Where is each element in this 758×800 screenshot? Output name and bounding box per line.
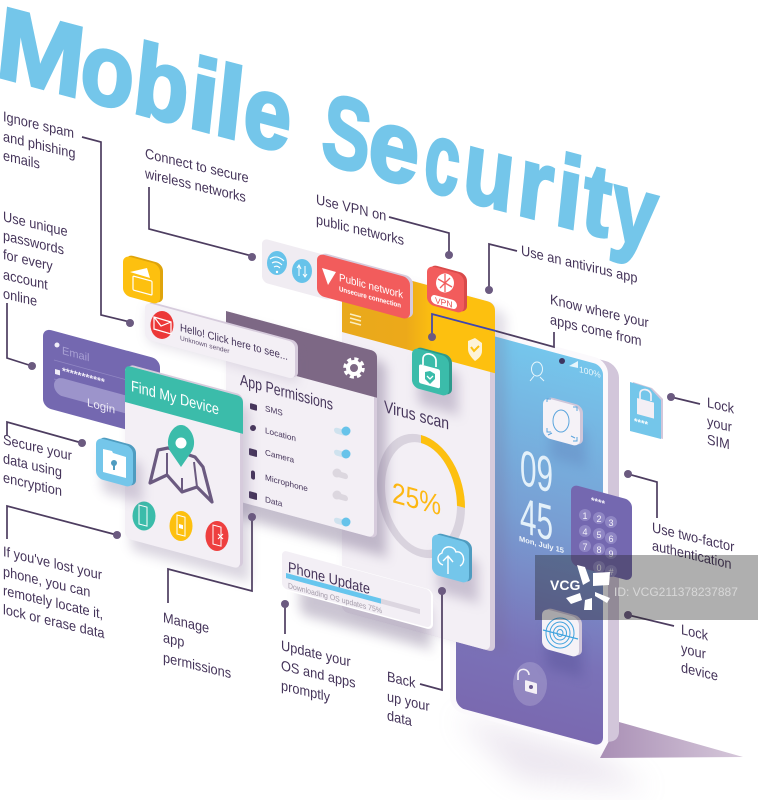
icon: sim card (630, 382, 663, 439)
panel: keypad: 6 (608, 534, 614, 544)
panel: find my device (125, 364, 249, 582)
phone (450, 318, 619, 753)
panel: login: *********** (62, 366, 105, 389)
panel: phone update: Downloading OS updates 75% (288, 581, 382, 615)
panel: keypad: 9 (608, 549, 614, 559)
callout: manage permissions (163, 513, 256, 682)
icon: map pin (168, 425, 194, 467)
panel: public network: Unsecure connection (339, 285, 401, 310)
callout: lost phone: phone, you can (3, 564, 90, 600)
panel: keypad: 8 (596, 545, 602, 555)
panel: login: Email (62, 345, 89, 364)
title: r (513, 124, 559, 245)
icon: erase phone (206, 521, 228, 551)
watermark (535, 555, 758, 620)
title: e (239, 51, 298, 175)
icon: lock phone (170, 511, 192, 541)
chart: scan ring 25% (381, 428, 461, 564)
panel: phishing message (145, 301, 298, 382)
icon: vpn tile: VPN (435, 295, 452, 310)
permission rows: SMS (265, 403, 283, 418)
title: i (184, 36, 225, 156)
toggles (332, 426, 350, 527)
icon: locate phone (132, 502, 156, 530)
callout: update os (281, 600, 356, 711)
callout: app sources: Know where your (550, 292, 649, 331)
icon: menu (350, 314, 361, 325)
panel: keypad: 1 (582, 511, 588, 521)
callout: lock device: device (681, 660, 718, 684)
title: S (317, 71, 376, 196)
callout: back up: Back (387, 669, 416, 691)
icon: envelope (150, 311, 174, 339)
panel: phishing message: Unknown sender (180, 335, 230, 356)
callout: encryption: encryption (3, 470, 62, 499)
icon: wallet tile (123, 254, 163, 305)
callout: ignore spam: Ignore spam (3, 109, 74, 141)
watermark: ID: VCG211378237887 (614, 585, 738, 599)
icon: sim card: **** (634, 416, 648, 430)
callout: two-factor: authentication (652, 538, 732, 572)
panel: keypad: 7 (582, 542, 588, 552)
icon: map (150, 448, 212, 502)
title: o (76, 8, 140, 134)
callout: lock sim: Lock (707, 395, 734, 417)
callout: update os: OS and apps (281, 658, 356, 691)
title: t (578, 140, 617, 259)
callout: lost phone: lock or erase data (3, 602, 105, 642)
icon: gear (345, 359, 363, 377)
icon: unlock (513, 662, 547, 706)
panel: find my device: Find My Device (131, 378, 219, 419)
panel: keypad (571, 484, 632, 581)
clock: 45 (520, 487, 553, 552)
icon: face tile (543, 396, 586, 468)
icon: folder tile (96, 436, 142, 503)
callout: unique passwords: for every (3, 247, 53, 274)
clock: Mon, July 15 (519, 534, 565, 555)
title: u (459, 109, 520, 234)
title: i (551, 133, 588, 252)
callout: encryption: data using (3, 451, 62, 480)
callout: lock device (624, 611, 718, 684)
phone status bar: 100% (579, 364, 601, 380)
callout: app sources: apps come from (550, 312, 642, 349)
icon: shield (468, 338, 482, 361)
callout: update os: promptly (281, 678, 330, 705)
phone status bar (559, 358, 601, 380)
title: l (210, 43, 250, 162)
callout: lock sim: your (707, 414, 732, 435)
title: b (129, 22, 195, 148)
permission rows: Data (265, 494, 283, 509)
permission rows (249, 403, 308, 509)
callout: unique passwords: account (3, 267, 48, 293)
callout: unique passwords (3, 209, 68, 370)
callout: manage permissions: app (163, 630, 185, 650)
callout: unique passwords: passwords (3, 228, 64, 258)
callout: lock device: Lock (681, 622, 708, 644)
antivirus header (342, 262, 495, 373)
callout: vpn (316, 192, 453, 259)
icon: fingerprint tile (542, 607, 582, 678)
icon: arrows (292, 259, 312, 283)
title: c (420, 99, 466, 219)
permission rows: Location (265, 425, 296, 443)
panel: public network: Public network (339, 272, 403, 301)
callout: back up (387, 587, 446, 733)
callout: ignore spam (3, 109, 134, 327)
permission rows: Camera (265, 447, 294, 465)
panel: keypad: **** (591, 495, 605, 509)
phone shadow (455, 715, 743, 790)
clock: 09 (520, 439, 553, 504)
find my device header (125, 365, 243, 434)
callout: back up: up your (387, 689, 430, 714)
callout: manage permissions: Manage (163, 610, 209, 636)
callout: secure wireless (144, 145, 256, 261)
callout: unique passwords: online (3, 286, 37, 309)
callout: secure wireless: Connect to secure (145, 146, 249, 186)
callout: lost phone: remotely locate it, (3, 583, 103, 622)
callout: encryption (3, 422, 86, 502)
panel: phishing message: Hello! Click here to see... (180, 322, 288, 363)
title: y (606, 148, 663, 272)
callout: lock device: your (681, 641, 706, 662)
callout: two-factor: Use two-factor (652, 520, 735, 555)
chart: scan ring 25%: 25% (392, 477, 441, 522)
panel: keypad: 0 (596, 563, 602, 573)
permission rows: Microphone (265, 472, 308, 494)
progress bar (286, 573, 420, 614)
callout: antivirus: Use an antivirus app (521, 243, 638, 286)
callout: app sources (428, 292, 649, 351)
heading: app permissions: App Permissions (240, 371, 333, 414)
title: e (364, 83, 426, 209)
panel: keypad: 4 (582, 527, 588, 537)
callout: lost phone: If you've lost your (3, 544, 102, 583)
icon: cloud tile (432, 532, 478, 603)
watermark: VCG (550, 577, 580, 593)
callout: lost phone (3, 506, 121, 642)
panel: antivirus (342, 262, 506, 653)
panel: login (43, 328, 160, 439)
clock (519, 439, 565, 555)
panel: keypad: 3 (608, 518, 614, 528)
callout: ignore spam: emails (3, 148, 40, 172)
icon: wifi (267, 251, 287, 275)
panel: keypad: 2 (596, 514, 602, 524)
callout: back up: data (387, 708, 412, 729)
panel: public network (317, 252, 413, 320)
panel: keypad: # (608, 567, 614, 577)
panel: phone update (280, 549, 433, 649)
callout: secure wireless: wireless networks (144, 165, 246, 205)
panel: wireless network (262, 238, 332, 301)
permissions header (226, 311, 377, 398)
callout: vpn: public networks (316, 212, 404, 248)
callout: manage permissions: permissions (163, 650, 231, 682)
callout: vpn: Use VPN on (316, 192, 386, 224)
callout: two-factor (624, 470, 735, 573)
callout: unique passwords: Use unique (3, 209, 68, 240)
callout: lock sim: SIM (707, 432, 730, 453)
icon: lock tile (412, 346, 458, 415)
icon: user (530, 362, 544, 381)
title (0, 0, 663, 272)
callout: lock sim (667, 393, 734, 454)
panel: login: Login (87, 396, 115, 417)
heading: virus scan: Virus scan (384, 396, 449, 433)
heading: phone update: Phone Update (288, 559, 370, 598)
callout: update os: Update your (281, 638, 351, 670)
panel: app permissions (226, 311, 386, 557)
panel: keypad: 5 (596, 530, 602, 540)
callout: antivirus (485, 243, 638, 294)
callout: ignore spam: and phishing (3, 129, 75, 161)
callout: encryption: Secure your (3, 432, 72, 464)
icon: vpn tile (427, 264, 467, 314)
